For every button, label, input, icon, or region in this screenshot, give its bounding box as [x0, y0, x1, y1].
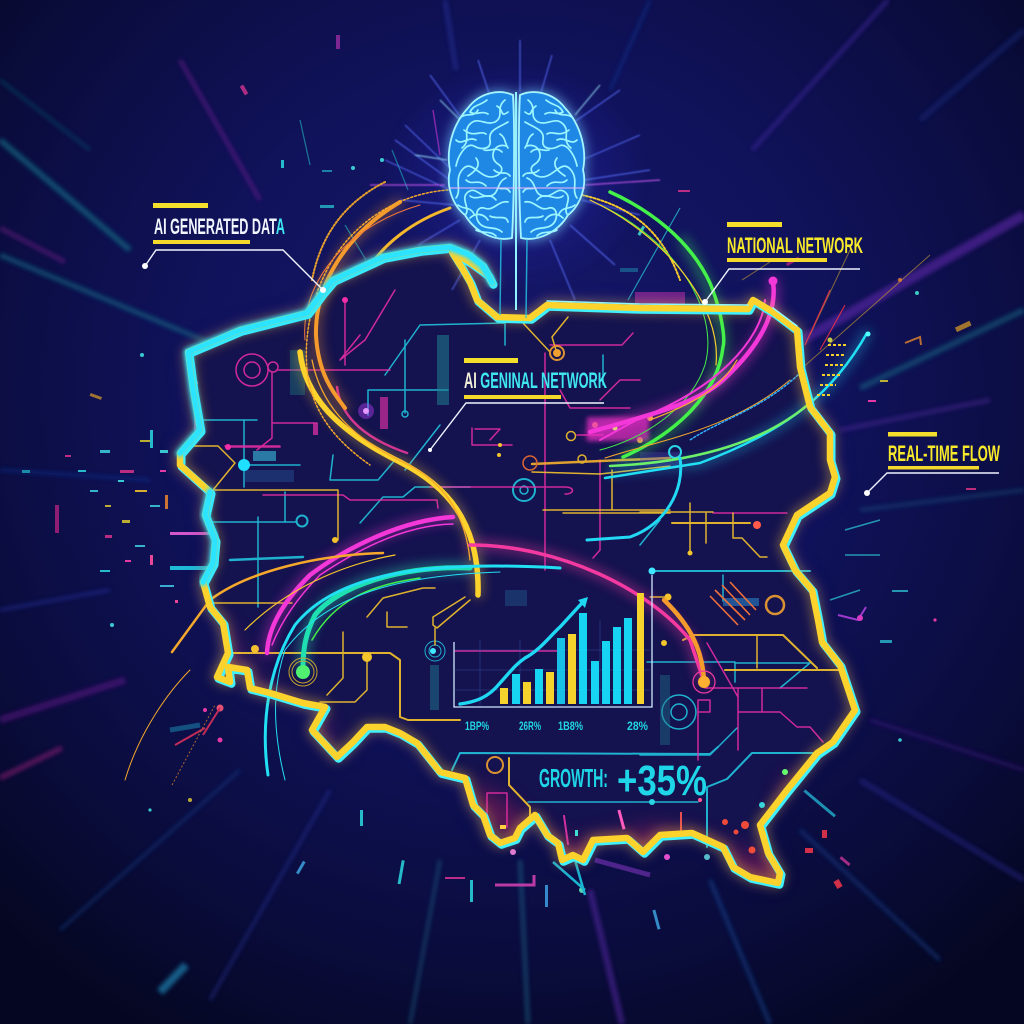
- growth callout: +35%: [617, 757, 707, 805]
- brain halo: [381, 60, 651, 290]
- callout: AI genial network: AI GENINAL NETWORK: [464, 368, 607, 393]
- chart axis labels: 1BP%: [465, 719, 489, 733]
- circuit lines inside the map: [190, 290, 843, 847]
- callout: AI genial network: [428, 358, 607, 452]
- callout: national network: NATIONAL NETWORK: [727, 233, 863, 258]
- bar chart: growth: [454, 575, 652, 707]
- chart axis labels: [465, 719, 648, 733]
- chart axis labels: 28%: [627, 719, 648, 733]
- callout: national network: [702, 222, 863, 305]
- data flows from brain and across the map: [125, 182, 867, 780]
- growth callout: GROWTH:: [539, 763, 608, 793]
- callout: AI generated data: AI GENERATED DATA: [154, 214, 285, 239]
- callout: real-time flow: [864, 432, 1000, 496]
- growth callout: [539, 757, 707, 805]
- chart axis labels: 1B8%: [558, 719, 583, 733]
- rays bursting from brain: [370, 40, 660, 300]
- flow end nodes: [289, 276, 870, 693]
- dense data blocks: [192, 292, 788, 854]
- map of Poland: glowing border: [180, 247, 856, 885]
- chart axis labels: 26R%: [519, 719, 541, 733]
- callout: AI generated data: [142, 203, 326, 293]
- brain icon: [449, 92, 585, 318]
- map of Poland: interior: [180, 247, 855, 883]
